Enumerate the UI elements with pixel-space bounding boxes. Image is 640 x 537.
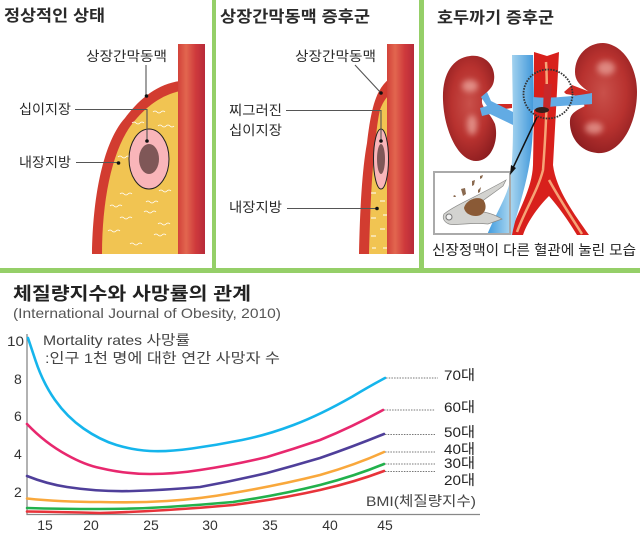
age labels: 70대 [444,367,475,383]
y axis labels [7,333,24,500]
x axis labels: 35 [262,517,278,533]
label: compressed duodenum [229,103,282,138]
duodenum [129,129,169,189]
line: age 70s [28,338,385,451]
y axis labels: 2 [14,484,22,500]
label: compressed duodenum: 십이지장 [229,123,282,138]
vein constriction [535,107,549,113]
x axis labels: 30 [202,517,218,533]
y axis labels: 4 [14,446,22,462]
label: visceral fat: 내장지방 [19,155,71,170]
icon: right kidney [570,43,637,153]
visceral fat [102,91,180,254]
x axis title: BMI(체질량지수) [366,493,476,509]
renal veins [480,92,592,125]
panel: normal state [4,7,205,254]
heading: nutcracker syndrome: 호두까기 증후군 [437,9,554,27]
heading: SMA syndrome: 상장간막동맥 증후군 [220,8,370,26]
age labels: 50대 [444,424,475,440]
vena cava [487,55,534,235]
label: compressed duodenum: 찌그러진 [229,103,282,118]
mesenteric artery wall [359,79,389,254]
icon: left kidney [443,56,496,161]
aorta [387,44,414,254]
renal arteries [495,85,592,110]
visceral fat [369,95,389,254]
icon: nutcracker [443,175,506,225]
compressed lumen [377,144,385,174]
chart title: 체질량지수와 사망률의 관계 [13,284,251,304]
fat texture [108,111,174,245]
line: age 50s [27,434,384,491]
duodenum lumen [139,144,159,174]
x axis labels: 40 [322,517,338,533]
age labels: 60대 [444,399,475,415]
leader lines [286,65,383,210]
dotted leaders [384,378,438,472]
label: superior mesenteric artery: 상장간막동맥 [295,49,376,64]
chart panel: BMI and mortality [7,284,480,533]
y axis labels: 10 [7,333,24,349]
compressing artery branch [543,84,552,111]
caption: 신장정맥이 다른 혈관에 눌린 모습 [432,242,636,258]
label: superior mesenteric artery: 상장간막동맥 [86,49,167,64]
aorta and iliac arteries [510,52,589,235]
x axis labels: 25 [143,517,159,533]
label: duodenum: 십이지장 [19,102,71,117]
aorta [178,44,205,254]
line: age 20s [27,471,384,513]
heading: normal state: 정상적인 상태 [4,7,105,25]
y axis labels: 8 [14,371,22,387]
leader lines [75,65,149,165]
panel: SMA syndrome [220,8,414,254]
x axis labels [37,517,393,533]
panel: nutcracker syndrome [432,9,637,258]
chart source: (International Journal of Obesity, 2010) [13,305,281,321]
label: visceral fat: 내장지방 [229,200,282,215]
age labels: 30대 [444,455,475,471]
x axis labels: 20 [83,517,99,533]
line: age 30s [27,464,384,509]
chart note: :인구 1천 명에 대한 연간 사망자 수 [45,350,280,366]
y axis labels: 6 [14,408,22,424]
mesenteric artery wall [92,81,180,254]
dotted circle [524,70,572,118]
chart note: Mortality rates 사망률 [43,332,190,348]
line: age 60s [27,410,383,474]
x axis labels: 15 [37,517,53,533]
inset frame: nutcracker [434,172,510,234]
x axis labels: 45 [377,517,393,533]
axes [27,334,480,514]
panel dividers [0,0,640,273]
age labels: 20대 [444,472,475,488]
compressed duodenum [374,129,388,189]
arrow: to inset [510,117,537,175]
age labels: 40대 [444,441,475,457]
fat texture [371,193,388,248]
age labels [444,367,475,488]
line: age 40s [27,452,384,502]
chart note [43,332,280,366]
